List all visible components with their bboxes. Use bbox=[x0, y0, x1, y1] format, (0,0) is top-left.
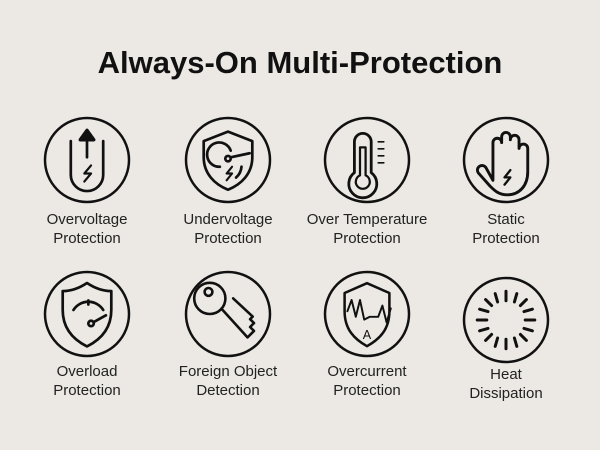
label: foreign object: Foreign Object bbox=[179, 363, 277, 380]
label: overcurrent bbox=[327, 363, 407, 399]
label: undervoltage bbox=[183, 211, 273, 247]
label: over temperature: Over Temperature bbox=[307, 211, 427, 228]
label: static: Protection bbox=[472, 230, 540, 247]
label: heat dissipation: Dissipation bbox=[469, 385, 543, 402]
label: overload bbox=[53, 363, 121, 399]
icon: undervoltage bbox=[186, 118, 270, 202]
label: overload: Overload bbox=[57, 363, 117, 380]
label: over temperature: Protection bbox=[333, 230, 401, 247]
icon: overvoltage bbox=[45, 118, 129, 202]
title: Always-On Multi-Protection bbox=[98, 45, 502, 80]
icon: overcurrent bbox=[325, 272, 409, 356]
icon: overload bbox=[45, 272, 129, 356]
label: heat dissipation: Heat bbox=[490, 366, 522, 383]
icon: overcurrent: A bbox=[363, 328, 372, 342]
icon: key bbox=[186, 272, 270, 356]
label: overvoltage bbox=[47, 211, 127, 247]
icon: static hand bbox=[464, 118, 548, 202]
label: static bbox=[472, 211, 540, 247]
label: heat dissipation bbox=[469, 366, 543, 402]
icon: thermometer bbox=[325, 118, 409, 202]
label: foreign object: Detection bbox=[196, 382, 260, 399]
label: overcurrent: Protection bbox=[333, 382, 401, 399]
label: overvoltage: Overvoltage bbox=[47, 211, 127, 228]
label: overload: Protection bbox=[53, 382, 121, 399]
icon: heat dissipation bbox=[464, 278, 548, 362]
label: over temperature bbox=[307, 211, 427, 247]
label: static: Static bbox=[487, 211, 525, 228]
label: undervoltage: Protection bbox=[194, 230, 262, 247]
label: overcurrent: Overcurrent bbox=[327, 363, 407, 380]
label: foreign object bbox=[179, 363, 278, 399]
label: undervoltage: Undervoltage bbox=[183, 211, 273, 228]
label: overvoltage: Protection bbox=[53, 230, 121, 247]
